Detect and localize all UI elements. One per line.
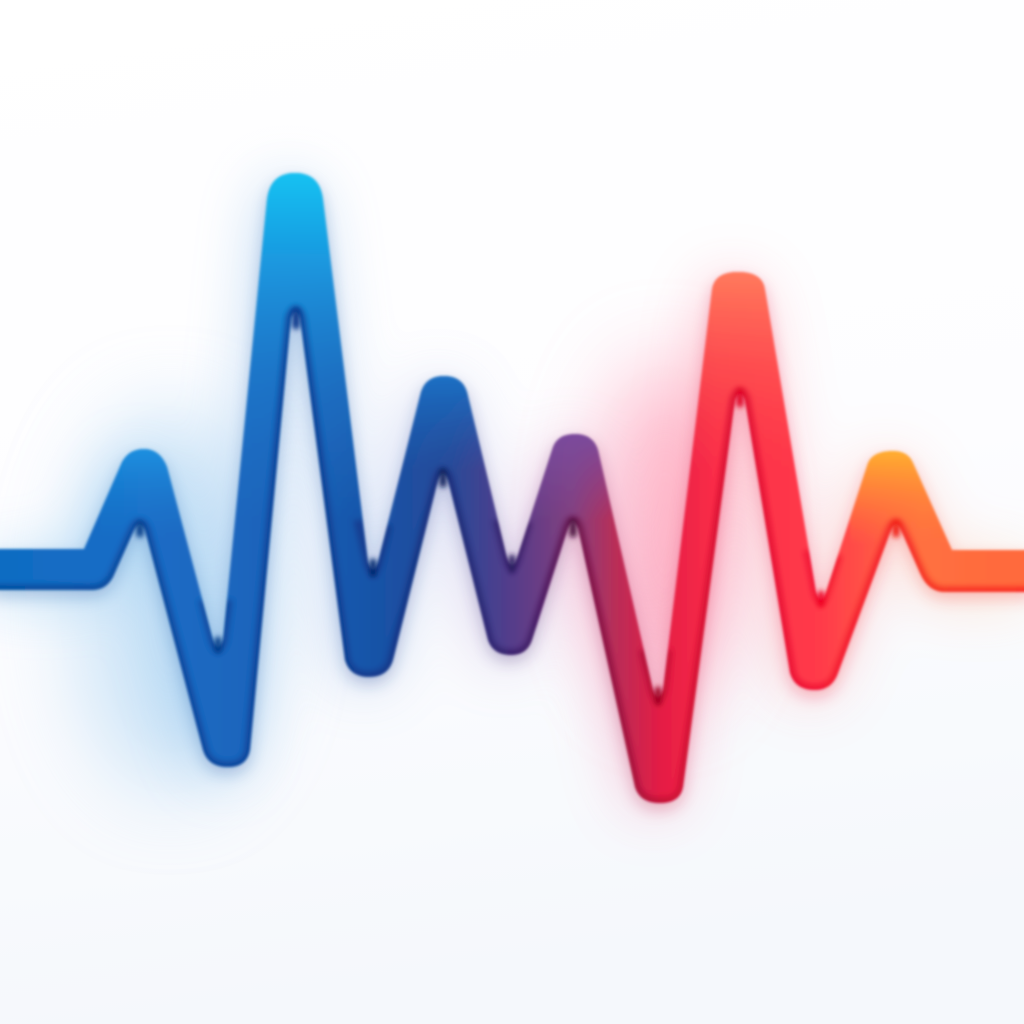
notch: first low xyxy=(136,525,144,534)
notch: middle peak xyxy=(440,472,446,484)
shaded and highlighted details xyxy=(0,165,1024,803)
notch: sixth low xyxy=(818,594,824,604)
notch: third low xyxy=(370,562,376,574)
notch: tall peak xyxy=(292,312,300,326)
peak highlight: middle blue xyxy=(409,374,480,453)
peak highlight: red xyxy=(696,270,788,439)
notch: second low xyxy=(214,640,222,650)
peak highlight: violet xyxy=(542,434,610,510)
peak highlight: cyan xyxy=(245,172,354,512)
V notch shading xyxy=(203,520,838,698)
pink background tint xyxy=(600,360,730,700)
lower inner edge shading xyxy=(0,311,1024,803)
waveform line xyxy=(0,165,1024,803)
notch: fifth low xyxy=(654,690,662,702)
line body xyxy=(0,173,1024,803)
soft coloured glow xyxy=(0,181,1024,811)
notch: fourth low xyxy=(508,558,516,570)
peak highlight: orange xyxy=(850,450,935,535)
peak highlight: left blue xyxy=(104,448,176,532)
waveform contact shadow xyxy=(0,180,1024,810)
notch: red peak xyxy=(736,392,744,404)
blue background tint xyxy=(75,410,265,790)
notch: orange peak xyxy=(892,524,900,534)
notch: violet peak xyxy=(570,522,576,534)
dark notch gaps xyxy=(140,312,896,702)
